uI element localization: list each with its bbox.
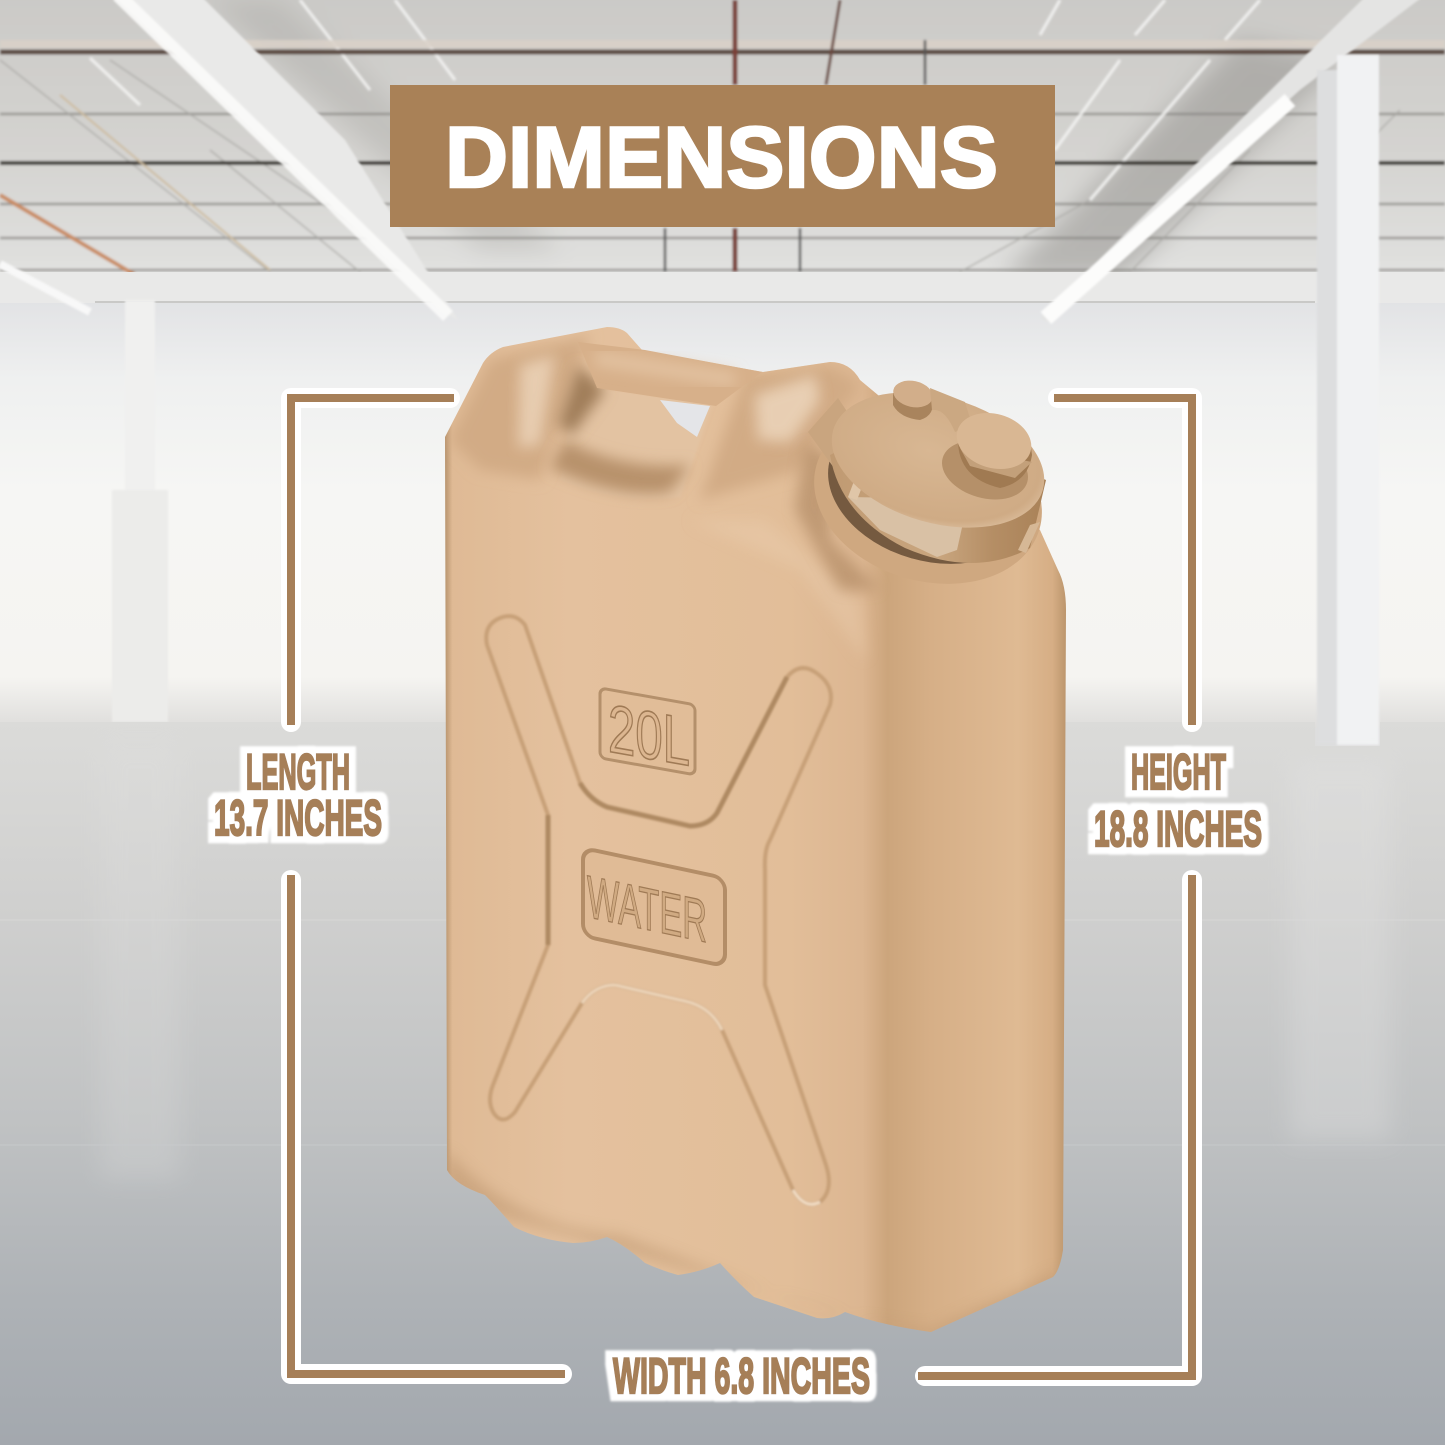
handle and opening [550,342,762,499]
label: height: 18.8 INCHES [1094,801,1262,857]
20L embossed label: 20L [608,690,690,781]
title banner [390,85,1055,227]
columns [112,55,1379,745]
jug body with soft shading [445,327,1066,1340]
back wall [0,303,1445,728]
20L embossed label [600,688,695,782]
dimension bracket: length [291,398,565,1374]
dimension bracket: height [918,398,1192,1376]
WATER embossed label [583,848,725,966]
spout cap [950,405,1038,488]
screw cap [793,369,1063,610]
ceiling [0,0,1445,305]
product: water jug [445,327,1066,1340]
embossed X pattern [486,616,831,1204]
label: height [1094,744,1262,857]
ceiling light beams [0,0,1425,322]
label: length: LENGTH [246,744,350,800]
label: length: 13.7 INCHES [214,790,382,846]
label: height: HEIGHT [1131,744,1226,800]
vent knob [891,377,972,432]
label: length [214,744,382,846]
floor [0,722,1445,1445]
title banner: DIMENSIONS [445,110,998,206]
label: width: WIDTH 6.8 INCHES [613,1348,870,1404]
WATER embossed label: WATER [587,862,707,955]
